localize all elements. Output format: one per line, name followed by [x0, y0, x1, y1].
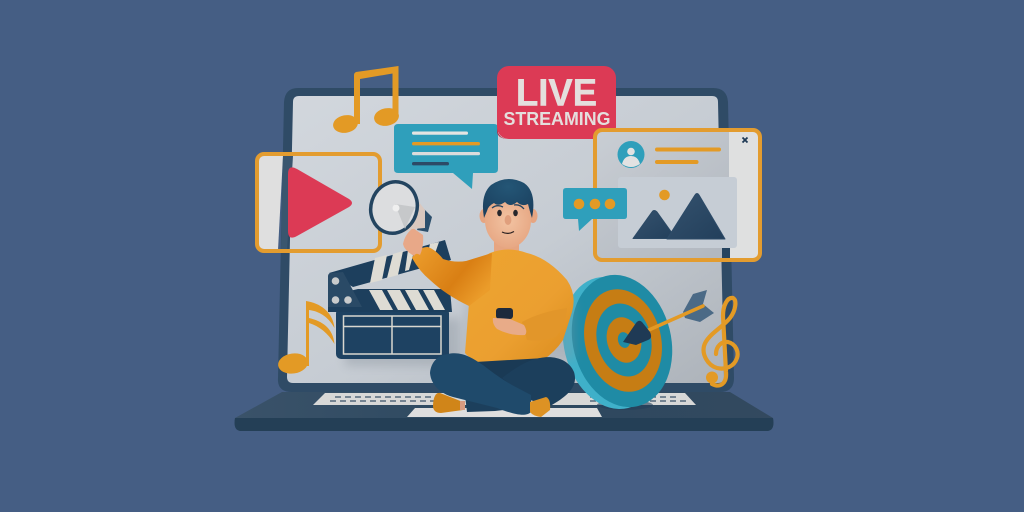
- target face: [558, 264, 686, 418]
- lower leg: [465, 395, 520, 412]
- icon: play triangle: [288, 167, 352, 238]
- megaphone rim: [364, 176, 424, 239]
- hinge screws: [332, 277, 352, 304]
- live streaming badge: [497, 66, 616, 139]
- right thigh: [502, 357, 575, 406]
- treble clef: [704, 298, 738, 386]
- left ankle: [460, 401, 465, 410]
- torso shadow on screen: [465, 300, 575, 360]
- megaphone tail: [417, 209, 432, 232]
- window light side panel: [729, 130, 760, 260]
- ears: [480, 209, 488, 223]
- clapper lower bar: [328, 289, 452, 312]
- clapper body: [336, 308, 449, 359]
- window fill: [595, 130, 760, 260]
- laptop base: [235, 392, 773, 430]
- small speech bubble with dots: [563, 188, 627, 231]
- bullseye: [616, 331, 632, 349]
- clapperboard: [328, 240, 460, 366]
- clapper shadow: [345, 318, 460, 366]
- laptop: [235, 88, 773, 431]
- trackpad: [407, 408, 602, 417]
- music note: double flag note: [277, 301, 334, 375]
- raised arm sleeve: [412, 247, 492, 306]
- avatar icon: [618, 141, 644, 168]
- megaphone: [364, 176, 432, 256]
- person: [364, 176, 575, 417]
- clapper hinge: [328, 272, 362, 307]
- left thigh: [430, 353, 531, 415]
- target shadow: [597, 400, 653, 410]
- arrow shaft: [642, 306, 703, 333]
- sun dot: [659, 190, 670, 200]
- profile lines: [655, 148, 721, 164]
- orange window border: [595, 130, 760, 260]
- megaphone horn: [399, 186, 425, 234]
- hair: [483, 179, 533, 218]
- target side: [549, 266, 675, 420]
- raised hand: [403, 228, 423, 256]
- large mountain: [667, 194, 725, 239]
- inner orange ring: [602, 314, 646, 366]
- megaphone centre: [392, 204, 400, 212]
- small mountain: [633, 210, 676, 238]
- music note: top beamed notes: [332, 66, 400, 135]
- phone: [496, 308, 513, 319]
- image card: [618, 177, 737, 248]
- profile window frame: [595, 130, 760, 260]
- right arm sleeve: [522, 308, 567, 341]
- clapper upper arm: [329, 240, 451, 287]
- laptop screen bezel: [278, 88, 734, 392]
- eyes: [497, 210, 502, 216]
- speech bubble: teal text lines: [394, 124, 498, 189]
- laptop screen display: [287, 96, 724, 383]
- badge text: LIVE: LIVE: [516, 72, 597, 114]
- orange ring: [574, 281, 672, 400]
- head: [480, 179, 538, 248]
- mouth: [502, 232, 514, 233]
- arrow fletching: [683, 290, 714, 322]
- upper arm stripes: [370, 242, 439, 283]
- screen edge peek: [722, 248, 730, 259]
- badge text: STREAMING: STREAMING: [504, 108, 610, 129]
- waist shadow: [475, 358, 545, 395]
- base front edge: [235, 418, 773, 431]
- target with arrow: [549, 264, 714, 420]
- lower bar stripes: [369, 290, 445, 310]
- right shoe: [530, 397, 550, 417]
- keyboard: [313, 393, 696, 405]
- right hand: [493, 318, 526, 335]
- orange sweater torso: [455, 250, 574, 370]
- teal ring: [589, 298, 659, 382]
- left shoe: [433, 393, 463, 413]
- nose: [505, 215, 511, 225]
- arrow head: [623, 321, 651, 345]
- eyebrows: [492, 205, 524, 209]
- frame highlight: [259, 156, 283, 250]
- close icon: [742, 138, 748, 142]
- orange frame: [257, 154, 380, 251]
- face: [485, 198, 531, 248]
- crossed legs: [430, 353, 575, 417]
- megaphone inner cone: [395, 204, 415, 229]
- neck: [494, 238, 519, 254]
- video frame with play button: [257, 154, 380, 251]
- frame dark screen edge: [281, 156, 293, 250]
- clapper grid: [344, 316, 441, 354]
